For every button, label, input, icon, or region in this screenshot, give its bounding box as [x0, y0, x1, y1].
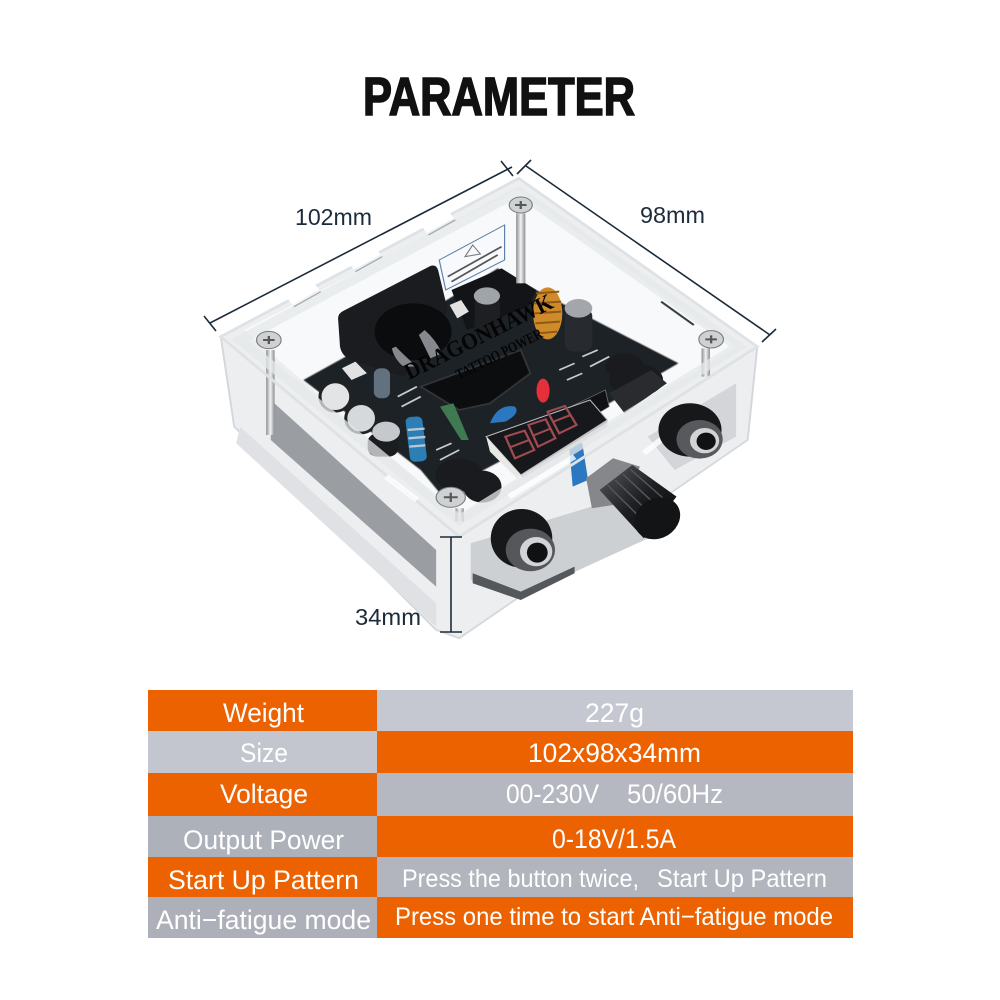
internal jack rear left [435, 458, 502, 503]
board brand lettering: TATTOO POWER [454, 326, 546, 384]
row: size [148, 731, 853, 773]
row: voltage [148, 773, 853, 816]
row: size: 102x98x34mm [528, 738, 701, 768]
row: anti-fatigue mode: Anti−fatigue mode [156, 905, 371, 935]
capacitors on board [320, 287, 592, 457]
label: 34mm: 34mm [355, 604, 421, 630]
row: voltage: 50/60Hz [627, 779, 723, 809]
row: size: Size [240, 738, 288, 768]
dimension line: 34mm [440, 537, 462, 632]
dark rear block [452, 268, 536, 330]
acrylic top frame [221, 178, 757, 537]
row: start up pattern: Start Up Pattern [168, 865, 359, 895]
board brand lettering: DRAGONHAWK [400, 289, 557, 384]
control knob [586, 458, 689, 547]
row: anti-fatigue mode [148, 897, 853, 938]
internal jack rear right [605, 353, 667, 413]
front jack right [658, 403, 723, 459]
row: weight [148, 690, 853, 731]
warning label on back panel [439, 225, 505, 290]
row: anti-fatigue mode: Press one time to start Anti−fatigue mode [395, 903, 833, 931]
row: weight: Weight [223, 698, 304, 728]
red LED [537, 379, 550, 403]
circuit board [303, 268, 678, 493]
toroid coil [533, 287, 562, 339]
LED voltage display [486, 400, 607, 478]
standoff posts [266, 213, 710, 522]
row: start up pattern [148, 857, 853, 897]
dimension line: 102mm [204, 161, 513, 331]
row: output power: Output Power [183, 825, 344, 855]
row: weight: 227g [585, 698, 644, 728]
green capacitor and blue parts [405, 403, 588, 487]
board silkscreen details [398, 350, 609, 460]
white relays [342, 300, 469, 380]
row: start up pattern: Press the button twice, [402, 865, 639, 893]
dimension line: 98mm [517, 160, 776, 342]
row: start up pattern: Start Up Pattern [657, 865, 827, 893]
row: voltage: 00-230V [506, 779, 599, 809]
acrylic case body [221, 178, 757, 638]
screws [257, 197, 723, 507]
row: output power [148, 816, 853, 857]
title: PARAMETER [363, 67, 635, 127]
row: output power: 0-18V/1.5A [552, 824, 676, 854]
power socket [338, 265, 452, 377]
product photo: acrylic power supply [221, 178, 757, 638]
IC chip [571, 390, 609, 425]
front jack left [491, 509, 555, 571]
label: 98mm: 98mm [640, 202, 705, 228]
transformer block [421, 350, 530, 410]
label: 102mm: 102mm [295, 204, 372, 230]
parameter table [148, 690, 853, 938]
row: voltage: Voltage [220, 779, 308, 809]
